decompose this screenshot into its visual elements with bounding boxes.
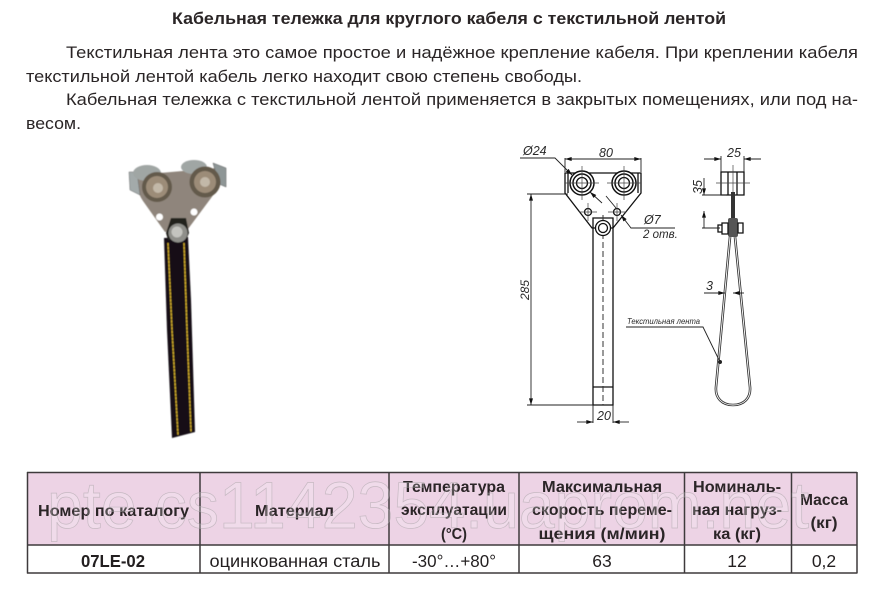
table: specifications [27,472,857,574]
header cell: rated load: Номиналь- [693,479,781,496]
dimension: 20 [577,405,629,423]
dimension: 3 [704,279,744,293]
header cell: temperature: эксплуатации [401,502,507,519]
row: values: 12 [727,551,747,571]
dimension: diameter 24: Ø24 [522,144,547,158]
header cell: catalogue number: Номер по каталогу [38,503,189,520]
text block: description: Кабельная тележка с текстильной лентой применяется в закрытых помещениях, или под на- [66,90,858,109]
header cell: mass: Масса [800,492,848,509]
row: values: 07LE-02 [81,551,145,571]
text block: description: текстильной лентой кабель легко находит свою степень свободы. [26,67,582,86]
header cell: maximum speed [532,479,672,543]
header cell: maximum speed: щения (м/мин) [538,526,666,543]
photo: right wheel [181,160,220,198]
row: values: 0,2 [812,551,836,571]
strap [593,218,613,405]
body outline [565,173,641,228]
dimension: 80: 80 [599,146,613,160]
dimension: diameter 7 [606,196,678,241]
header cell: rated load: ка (кг) [713,526,761,543]
text block: description [26,43,858,133]
drawing: front view with dimensions [518,144,678,423]
dimension: 20: 20 [596,409,611,423]
header cell: mass: (кг) [810,515,838,532]
photo: cable trolley with textile strap [129,160,226,438]
text block: description: весом. [26,114,81,133]
row: values: 63 [592,551,612,571]
header cell: rated load: ная нагруз- [692,502,782,519]
row: values [81,551,836,571]
row: values: оцинкованная сталь [210,551,380,571]
dimension: 80 [565,146,641,172]
header cell: temperature: (°С) [441,526,467,543]
leader: textile strap label [626,316,722,364]
header cell: rated load [692,479,782,543]
table body background [27,545,857,573]
drawing: side view with dimensions [626,146,761,405]
dimension: 35: 35 [691,180,705,194]
text block: description: Текстильная лента это самое простое и надёжное крепление кабеля. При креплении кабеля [66,43,858,62]
bolt [718,218,743,237]
dimension: diameter 24 [520,144,602,203]
title: Кабельная тележка для круглого кабеля с текстильной лентой [172,10,726,28]
header cell: maximum speed: скорость переме- [532,502,672,519]
stem [731,192,735,219]
dimension: 25 [704,146,761,172]
photo: steel plate [136,168,220,240]
dimension: diameter 7: 2 отв. [642,229,678,241]
photo: left bracket [129,172,140,195]
header cell: temperature [401,479,507,543]
photo: bolt [168,224,188,242]
watermark: pte cs1142354.uaprom.net [47,468,809,542]
header cell: mass [800,492,848,532]
header cell: material: Материал [255,503,334,520]
textile loop [716,237,750,405]
header cell: maximum speed: Максимальная [542,479,662,496]
leader: textile strap label: Текстильная лента [627,316,700,326]
table header background [27,472,857,545]
table grid [27,472,857,574]
wheels [565,166,641,200]
photo: right bracket [213,163,226,187]
header cell: temperature: Температура [403,479,505,496]
dimension: 3: 3 [706,279,713,293]
photo: left wheel [133,165,172,202]
dimension: diameter 7: Ø7 [643,213,662,227]
dimension: 285 [518,194,593,405]
dimension: 35 [691,178,726,228]
holes and bolt [579,203,626,236]
row: values: -30°…+80° [412,551,496,571]
photo: black textile strap [164,237,195,438]
wheels [721,172,744,195]
dimension: 25: 25 [726,146,741,160]
dimension: 285: 285 [518,280,532,301]
